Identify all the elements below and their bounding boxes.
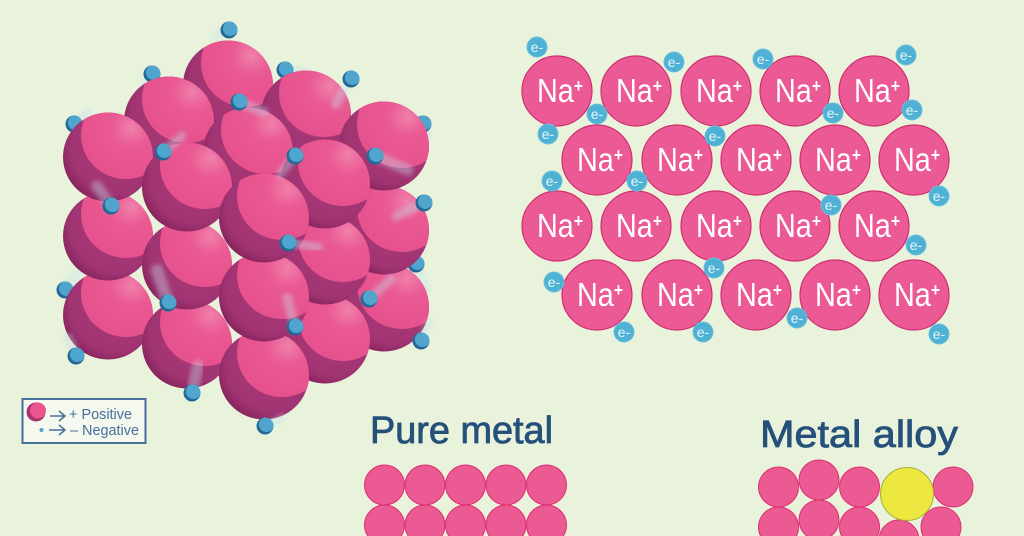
Na+ ion grid row 2: Na [736, 141, 778, 178]
electrons in front of the lattice with motion trails [68, 21, 433, 434]
Na+ ion grid row 3: Na [696, 207, 738, 244]
Na+ ion grid row 1: + [653, 76, 662, 96]
free electrons among the Na+ ions: e- [910, 237, 923, 253]
Na+ ion grid row 3: Na [854, 207, 896, 244]
Na+ ion grid row 2: Na [577, 141, 619, 178]
free electrons among the Na+ ions: e- [697, 324, 710, 340]
Na+ ion grid row 2: Na [657, 141, 699, 178]
heading: Pure metal: Pure metal [370, 410, 553, 452]
Na+ ion grid row 3: + [653, 211, 662, 231]
free electrons among the Na+ ions: e- [591, 106, 604, 122]
icon: negative electron [40, 428, 44, 432]
Na+ ion grid row 3: + [574, 211, 583, 231]
free electrons among the Na+ ions: e- [668, 54, 681, 70]
Na+ ion grid row 1: Na [616, 72, 658, 109]
electrons behind the lattice [56, 61, 432, 298]
Na+ ion grid row 3: + [812, 211, 821, 231]
Na+ ion grid row 4: Na [736, 276, 778, 313]
free electrons among the Na+ ions: e- [631, 173, 644, 189]
bottom layer of spheres [63, 241, 447, 420]
Na+ ion grid row 3: + [891, 211, 900, 231]
Na+ ion grid row 1: Na [854, 72, 896, 109]
Na+ ion grid row 3: Na [775, 207, 817, 244]
Na+ ion grid row 4: Na [657, 276, 699, 313]
Na+ ion grid row 3 [522, 191, 909, 261]
free electrons among the Na+ ions: e- [757, 51, 770, 67]
free electrons among the Na+ ions: e- [618, 324, 631, 340]
Na+ ion grid row 3: Na [537, 207, 579, 244]
Na+ ion grid row 4: + [694, 280, 703, 300]
middle layer of spheres [63, 164, 447, 342]
Na+ ion grid row 3: + [733, 211, 742, 231]
free electrons among the Na+ ions: e- [709, 128, 722, 144]
Na+ ion grid row 4: + [931, 280, 940, 300]
Na+ ion grid row 2: + [694, 145, 703, 165]
legend text: negative: – Negative [70, 422, 139, 439]
Na+ ion grid row 4: Na [577, 276, 619, 313]
legend text: positive: + Positive [69, 406, 132, 423]
arrow: positive [50, 411, 65, 421]
arrow: negative [49, 425, 65, 435]
legend: positive and negative [22, 399, 146, 443]
free electrons among the Na+ ions: e- [900, 47, 913, 63]
icon: positive ion [26, 402, 46, 422]
Na+ ion grid row 1: + [733, 76, 742, 96]
Na+ ion grid row 2: + [614, 145, 623, 165]
Na+ ion grid row 2: + [773, 145, 782, 165]
free electrons among the Na+ ions: e- [546, 173, 559, 189]
free electrons among the Na+ ions: e- [708, 260, 721, 276]
Na+ ion grid row 4: + [614, 280, 623, 300]
free electrons among the Na+ ions: e- [825, 197, 838, 213]
Na+ ion grid row 4 [562, 260, 949, 330]
free electrons among the Na+ ions: e- [542, 126, 555, 142]
Na+ ion grid row 1: + [891, 76, 900, 96]
Na+ ion grid row 1: Na [537, 72, 579, 109]
top layer of spheres [63, 19, 447, 262]
diagram: metal alloy atoms [758, 460, 973, 536]
diagram: 3D metal lattice of positive ions and electrons [56, 19, 447, 434]
Na+ ion grid row 2 [562, 125, 949, 195]
Na+ ion grid row 1: + [574, 76, 583, 96]
free electrons among the Na+ ions: e- [827, 105, 840, 121]
free electrons among the Na+ ions: e- [531, 39, 544, 55]
Na+ ion grid row 2: Na [815, 141, 857, 178]
free electrons among the Na+ ions [527, 37, 949, 344]
Na+ ion grid row 3: Na [616, 207, 658, 244]
free electrons among the Na+ ions: e- [548, 274, 561, 290]
Na+ ion grid row 2: + [852, 145, 861, 165]
heading: Metal alloy: Metal alloy [760, 414, 958, 456]
Na+ ion grid row 4: Na [894, 276, 936, 313]
Na+ ion grid row 1: Na [696, 72, 738, 109]
Na+ ion grid row 1: Na [775, 72, 817, 109]
Na+ ion grid row 1 [522, 56, 909, 126]
diagram: pure metal atoms [364, 465, 566, 536]
free electrons among the Na+ ions: e- [906, 102, 919, 118]
free electrons among the Na+ ions: e- [791, 310, 804, 326]
free electrons among the Na+ ions: e- [933, 188, 946, 204]
alloy atom: yellow [880, 468, 934, 520]
Na+ ion grid row 4: Na [815, 276, 857, 313]
Na+ ion grid row 4: + [852, 280, 861, 300]
free electrons among the Na+ ions: e- [933, 326, 946, 342]
Na+ ion grid row 2: + [931, 145, 940, 165]
Na+ ion grid row 2: Na [894, 141, 936, 178]
Na+ ion grid row 4: + [773, 280, 782, 300]
Na+ ion grid row 1: + [812, 76, 821, 96]
